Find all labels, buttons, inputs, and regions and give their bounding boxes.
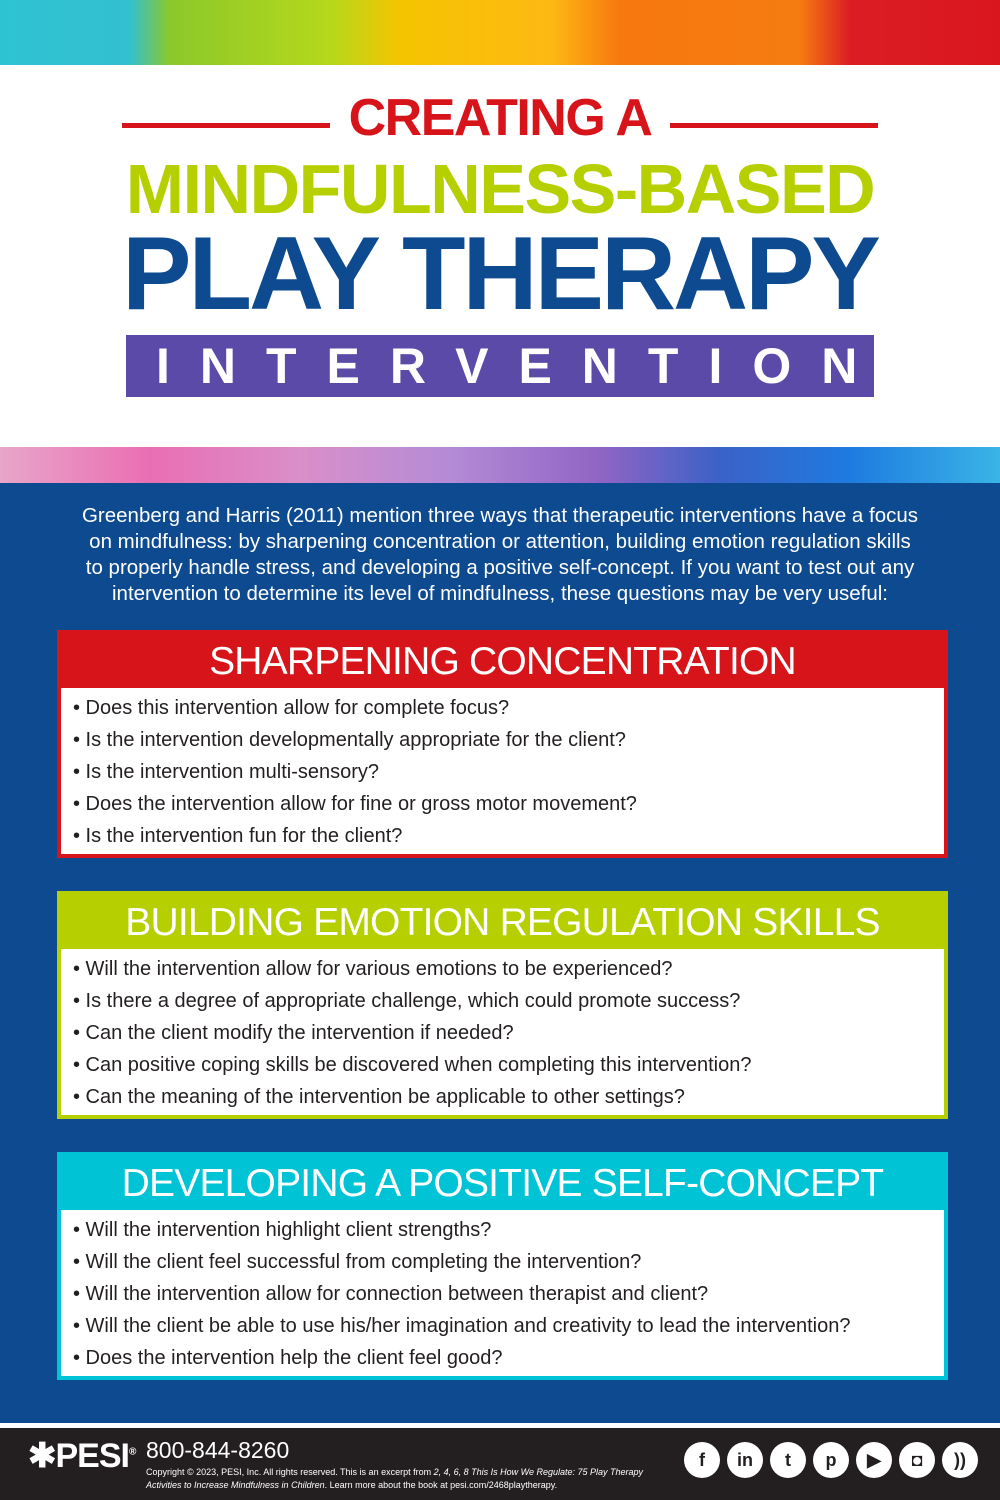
panel: emotion regulation: • Can the meaning of the intervention be applicable to other settings? [73,1086,685,1108]
top lego banner [0,0,1000,65]
heading [61,634,944,688]
title: CREATING A [349,89,651,147]
heading [61,895,944,949]
panel: self-concept: • Will the intervention allow for connection between therapist and client? [73,1283,708,1305]
intro text: Greenberg and Harris (2011) mention three ways that therapeutic interventions have a focus [82,504,918,527]
panel: self-concept: • Will the client feel successful from completing the intervention? [73,1251,641,1273]
intro text: on mindfulness: by sharpening concentration or attention, building emotion regulation skills [89,530,911,553]
panel: sharpening concentration: • Is the intervention multi-sensory? [73,761,379,783]
title [122,89,887,397]
heading: SHARPENING CONCENTRATION [209,640,796,683]
panel: self-concept [57,1152,948,1380]
copyright: Copyright © 2023, PESI, Inc. All rights reserved. This is an excerpt from 2, 4, 6, 8 This Is How We Regulate: 75 Play Therapy Activities to Increase Mindfulness in Children. Learn more about the book at pesi.com/2468playtherapy. [146,1467,643,1490]
phone: 800-844-8260 [146,1437,289,1463]
social icons: f [699,1450,705,1470]
panel: emotion regulation [57,891,948,1119]
social icons: t [785,1450,791,1470]
panel: emotion regulation: • Can positive coping skills be discovered when completing this intervention? [73,1054,751,1076]
blue background [0,483,1000,1423]
panel: emotion regulation: • Will the intervention allow for various emotions to be experienced? [73,958,673,980]
panel: sharpening concentration [57,630,948,858]
social icons: ▶ [867,1450,881,1470]
panel: sharpening concentration: • Does the intervention allow for fine or gross motor movement? [73,793,637,815]
panel: sharpening concentration: • Does this intervention allow for complete focus? [73,697,509,719]
panel: emotion regulation: • Can the client modify the intervention if needed? [73,1022,514,1044]
panel: sharpening concentration: • Is the intervention developmentally appropriate for the client? [73,729,626,751]
social icons: in [737,1450,753,1470]
panel: self-concept: • Will the client be able to use his/her imagination and creativity to lead the intervention? [73,1315,850,1337]
social icons: ◘ [912,1450,922,1470]
intro text [82,504,918,605]
lego strip [0,447,1000,483]
heading [61,1156,944,1210]
panel: self-concept: • Will the intervention highlight client strengths? [73,1219,491,1241]
intro text: to properly handle stress, and developing a positive self-concept. If you want to test out any [86,556,914,579]
intro text: intervention to determine its level of mindfulness, these questions may be very useful: [112,582,888,605]
title: INTERVENTION [156,338,887,394]
panel: emotion regulation: • Is there a degree of appropriate challenge, which could promote success? [73,990,740,1012]
heading: BUILDING EMOTION REGULATION SKILLS [125,901,880,944]
footer [0,1423,1000,1500]
heading: DEVELOPING A POSITIVE SELF-CONCEPT [122,1162,883,1205]
logo: ✱PESI® [28,1437,135,1475]
social icons: )) [954,1450,966,1470]
title: MINDFULNESS-BASED [126,150,874,228]
panel: sharpening concentration: • Is the intervention fun for the client? [73,825,402,847]
social icons [684,1442,978,1478]
panel: self-concept: • Does the intervention help the client feel good? [73,1347,503,1369]
social icons: p [826,1450,836,1470]
title: PLAY THERAPY [122,216,878,332]
